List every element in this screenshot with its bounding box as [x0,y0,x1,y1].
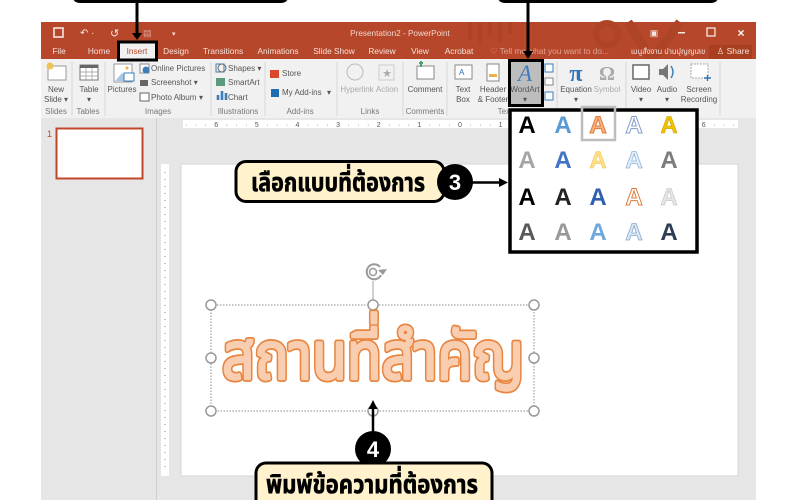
group: links: ★ [382,68,392,80]
ribbon tabs: Insert [127,46,148,56]
group: media [631,64,717,104]
group: media: Recording [681,95,717,104]
ruler [157,118,756,476]
number badge 3 [437,164,473,200]
arrow to insert tab [132,3,142,40]
title bar: ▤ [143,28,152,38]
gallery row 2: A [518,147,536,174]
rotate handle [367,264,387,305]
group: images: ▾ [199,93,203,102]
gallery row 3: A [554,184,572,211]
wordart text box [206,264,539,416]
gallery row 4: A [625,219,643,246]
group: media: Video [631,85,652,94]
gallery row 4: A [589,219,607,246]
group: tables [76,65,100,116]
gallery row 2: A [660,147,678,174]
group: links [340,64,398,116]
number badge 3: 3 [449,170,461,195]
callout 2 top [498,0,718,3]
group: add-ins: Add-ins [286,107,314,116]
title bar: ▾ [172,31,176,38]
group: add-ins [270,69,331,116]
group: images: Images [145,107,171,116]
group: tables: Tables [76,107,100,116]
group: links: Hyperlink [340,85,375,94]
wordart gallery [510,107,697,252]
wordart button: A [516,61,533,86]
group: text: & Footer [478,95,509,104]
group: illustrations: Chart [228,93,248,102]
slide thumbnail pane: 1 [47,129,52,139]
group: comments: Comment [408,85,443,94]
slide [181,164,738,476]
gallery row 1: A [554,112,572,139]
group: media: Audio [657,85,678,94]
ribbon tabs: Acrobat [445,46,474,56]
gallery row 3 [518,184,678,211]
group: media: ▾ [665,95,669,104]
ribbon tabs: Animations [257,46,299,56]
group: add-ins: Store [282,69,302,78]
ribbon tabs: Home [88,46,110,56]
group: symbols: Equation [560,85,592,94]
gallery row 4: A [660,219,678,246]
title bar: Presentation2 - PowerPoint [350,29,451,38]
ribbon tabs: Design [163,46,189,56]
gallery row 1: A [518,112,536,139]
arrow to text box [368,400,378,436]
callout 1 top [73,0,288,3]
group: text: Text [498,107,513,116]
group: add-ins: My Add-ins [282,88,322,97]
group: symbols: Symbol [594,85,621,94]
group: links: Action [376,85,398,94]
wordart text: สถานที่สำคัญ [222,312,524,393]
ribbon tabs: ♙ Share [717,46,750,56]
wordart button: WordArt [510,85,540,94]
gallery row 4: A [554,219,572,246]
title bar: ↶ · [80,28,94,39]
gallery row 2 [518,147,678,174]
group: slides: Slides [45,107,67,116]
gallery row 2: A [554,147,572,174]
wordart button: ▾ [523,95,527,104]
group: comments: Comments [406,107,444,116]
wordart button [510,61,542,105]
callout 4: พิมพ์ข้อความที่ต้องการ [266,466,478,499]
group: symbols: ▾ [574,95,578,104]
ribbon tabs [52,42,752,60]
gallery row 2: A [625,147,643,174]
wordart text: สถานที่สำคัญ [222,312,524,393]
ribbon tabs: Slide Show [313,46,356,56]
insert tab highlight [118,42,156,60]
gallery row 3: A [660,184,678,211]
ribbon tabs: Transitions [203,46,243,56]
group: add-ins: ▾ [327,88,331,97]
callout 4 [256,400,492,500]
ribbon tabs: เมนูสั่งงาน ปานปุญญเลข [631,46,705,57]
group: tables: Table [79,85,99,94]
group: illustrations: SmartArt [228,78,260,87]
group: text [455,64,553,116]
gallery row 3: A [589,184,607,211]
gallery row 1: A [589,112,607,139]
callout 3 [236,162,508,202]
group: symbols [560,61,621,104]
title bar: × [737,26,745,40]
arrow to gallery [470,178,508,187]
group: illustrations [216,64,261,116]
wordart button highlight [510,60,542,106]
gallery row 1: A [660,112,678,139]
gallery row 1 [518,112,678,139]
ribbon tabs: Review [368,46,397,56]
group: text: Header [480,85,506,94]
number badge 4: 4 [367,437,380,462]
ribbon tabs: View [411,46,430,56]
resize handles [206,300,539,416]
gallery row 1: A [625,112,643,139]
gallery row 3: A [518,184,536,211]
group: slides: Slide ▾ [44,95,68,104]
group: text: A [459,68,465,77]
title bar: ↺ [110,28,119,40]
group: links: Links [361,107,379,116]
gallery row 3: A [625,184,643,211]
group: slides [44,62,68,116]
group: images: Screenshot ▾ [151,78,198,87]
gallery row 2: A [589,147,607,174]
gallery row 4: A [518,219,536,246]
ruler: · · · 6 · · · 5 · · · 4 · · · 3 · · · 2 · · · 1 · · · 0 · · · 1 · · · 2 · · · 3 · · · 4 · · · 5 · · · 6 · · · [185,122,735,129]
group: symbols: Ω [599,63,615,85]
group: images [108,64,205,116]
group: illustrations: Illustrations [218,107,258,116]
group: media: ▾ [639,95,643,104]
slide thumbnail pane [41,118,157,500]
callout 3: เลือกแบบที่ต้องการ [251,164,425,197]
group: images: Photo Album [151,93,197,102]
group: symbols: π [569,61,583,87]
selection box [211,305,534,411]
group: media: Screen [686,85,712,94]
title bar: ▣ [650,28,658,38]
group: illustrations: Shapes ▾ [228,64,261,73]
group: tables: ▾ [87,95,91,104]
group: text: Box [456,95,470,104]
group: text: Text [456,85,471,94]
group: images: Pictures [108,85,136,94]
arrow to wordart [523,3,533,59]
gallery row 4 [518,219,678,246]
group: images: Online Pictures [151,64,205,73]
ribbon tabs: File [52,46,66,56]
number badge 4 [355,431,391,467]
group: comments [406,61,444,116]
title bar [41,22,756,60]
ribbon [41,59,756,118]
group: slides: New [48,85,64,94]
ribbon tabs: ♡ Tell me what you want to do... [490,46,609,56]
